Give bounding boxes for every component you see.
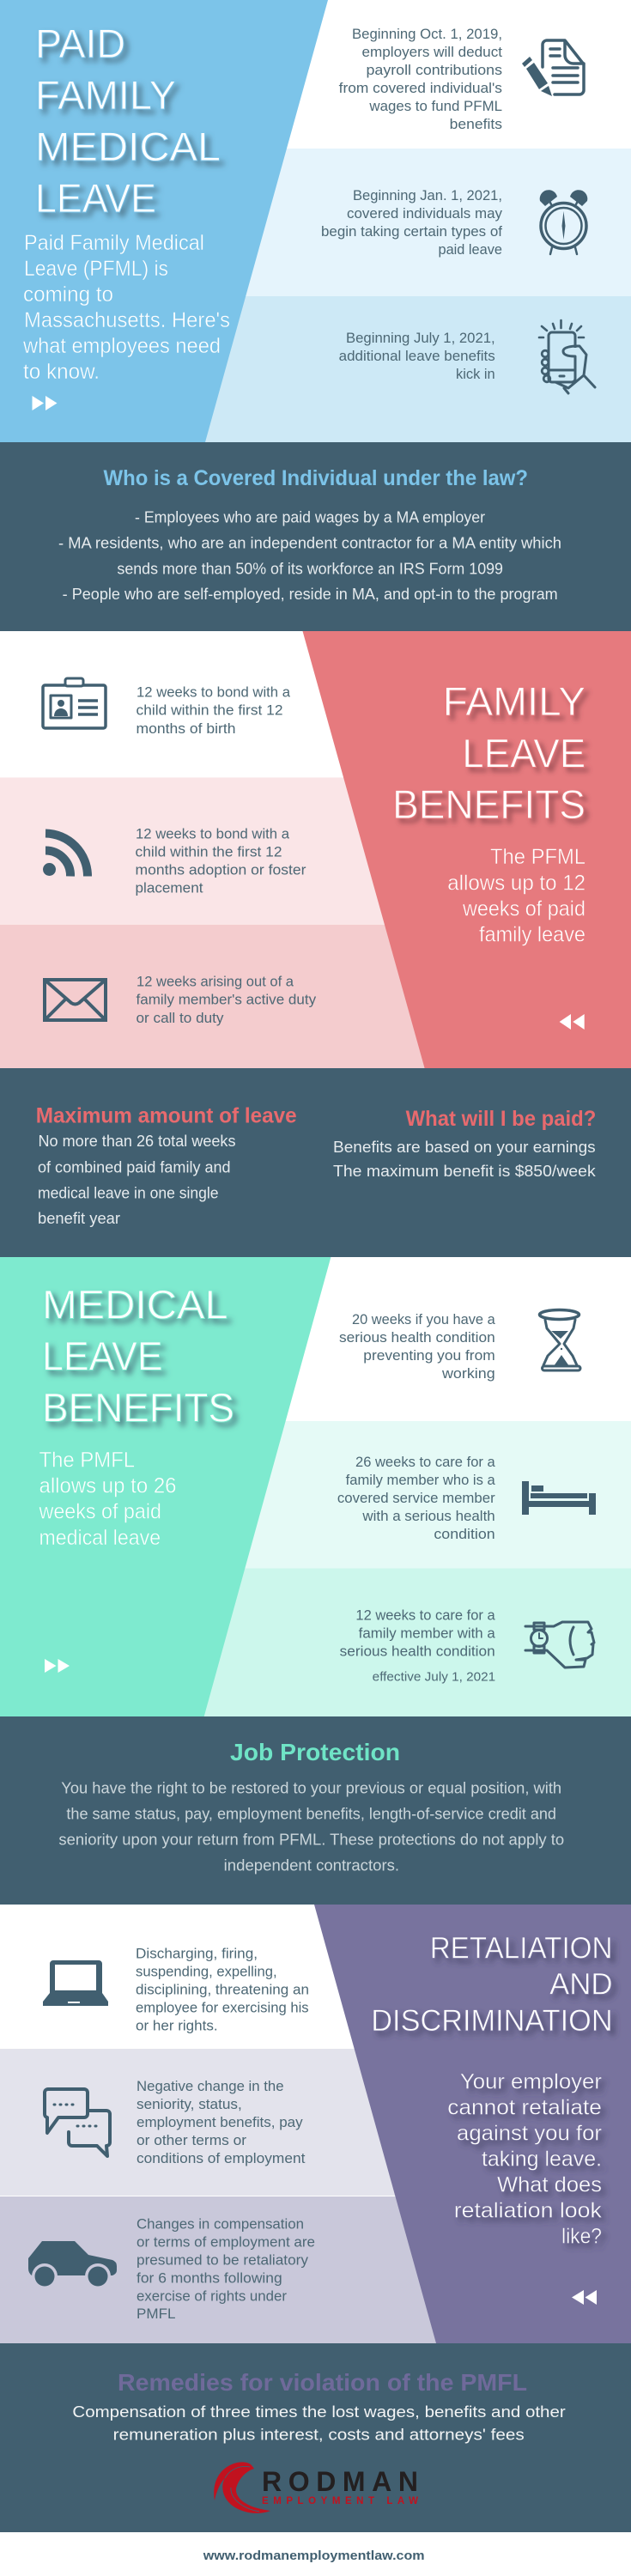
remedies text: Compensation of three times the lost wages, benefits and other: [72, 2403, 566, 2421]
text: maximum leave: medical leave in one single: [38, 1185, 218, 1202]
arrow: forward: [33, 396, 57, 410]
purple slanted panel: [314, 1905, 631, 2343]
summary text: [447, 845, 585, 946]
text: leave begins: begin taking certain types of: [321, 224, 502, 240]
text: bond adoption: [136, 827, 306, 896]
text: compensation changes: exercise of rights under: [137, 2288, 288, 2304]
row: serious health condition background: [0, 1257, 631, 1421]
footer website: www.rodmanemploymentlaw.com: [203, 2549, 425, 2563]
heading: Who is a Covered Individual under the law?: [103, 466, 528, 490]
text: negative change: conditions of employment: [137, 2151, 306, 2166]
text: leave begins: paid leave: [438, 242, 502, 258]
icon: id badge: [43, 678, 106, 728]
text: negative change: or other terms or: [137, 2133, 247, 2148]
icon: bed: [522, 1481, 596, 1515]
job protection text: independent contractors.: [224, 1856, 399, 1874]
teal slanted panel: [0, 1257, 331, 1716]
text: pay: Benefits are based on your earnings: [333, 1139, 596, 1156]
icon: hourglass: [539, 1310, 580, 1370]
summary text: medical leave: [39, 1526, 161, 1550]
text: leave begins: covered individuals may: [347, 206, 503, 222]
text: pay: [333, 1139, 597, 1180]
text: twenty six weeks: [337, 1455, 496, 1542]
panel: remedies: [0, 2343, 631, 2532]
text: bond adoption: child within the first 12: [136, 845, 282, 860]
text: twelve weeks: [340, 1607, 496, 1685]
icon: envelope: [45, 980, 106, 1020]
logo: rodman employment law: [214, 2462, 418, 2513]
text: bond adoption: months adoption or foster: [136, 863, 306, 878]
text: twelve weeks: family member with a: [359, 1625, 496, 1641]
blue slanted panel: [0, 0, 328, 442]
text: twelve weeks: 12 weeks to care for a: [355, 1607, 496, 1623]
summary text: The PFML: [490, 845, 585, 869]
heading: Remedies for violation of the PMFL: [118, 2369, 527, 2396]
intro text: to know.: [23, 360, 100, 384]
summary text: allows up to 12: [447, 871, 585, 895]
row: active duty background: [0, 924, 631, 1068]
covered individual list: - People who are self-employed, reside in MA, and opt-in to the program: [63, 586, 558, 603]
text: twenty weeks: preventing you from: [363, 1348, 495, 1364]
heading: maximum amount of leave: Maximum amount of leave: [36, 1103, 297, 1127]
title: BENEFITS: [392, 781, 585, 827]
logo: rodman employment law: RODMAN: [262, 2466, 418, 2497]
summary text: taking leave.: [482, 2148, 602, 2172]
intro text: coming to: [23, 283, 113, 307]
panel: paid family medical leave intro: [0, 0, 631, 442]
title: [392, 678, 585, 827]
summary text: [39, 1448, 176, 1550]
text: twenty weeks: working: [441, 1366, 495, 1382]
summary text: What does: [497, 2173, 602, 2197]
title: BENEFITS: [42, 1385, 234, 1431]
panel background: [0, 1716, 631, 1905]
heading: what will i be paid: What will I be paid?: [406, 1107, 596, 1131]
text: payroll contributions: from covered individual's: [339, 81, 502, 96]
summary text: family leave: [479, 922, 585, 946]
summary text: against you for: [457, 2122, 602, 2146]
text: twelve weeks: serious health condition: [340, 1643, 495, 1659]
summary text: Your employer: [460, 2070, 602, 2094]
text: payroll contributions: Beginning Oct. 1, 2019,: [352, 27, 502, 42]
title: LEAVE: [462, 730, 585, 775]
logo: rodman employment law: EMPLOYMENT LAW: [262, 2496, 418, 2506]
text: payroll contributions: payroll contributions: [366, 63, 502, 78]
text: additional benefits: [339, 331, 495, 382]
title: [371, 1932, 613, 2038]
text: additional benefits: kick in: [456, 367, 495, 382]
job protection text: [58, 1779, 564, 1874]
intro text: Leave (PFML) is: [24, 257, 168, 281]
text: maximum leave: of combined paid family and: [38, 1158, 231, 1176]
text: compensation changes: or terms of employment are: [137, 2234, 315, 2250]
covered individual list: - MA residents, who are an independent contractor for a MA entity which: [58, 534, 561, 551]
text: twenty six weeks: covered service member: [337, 1491, 495, 1506]
summary text: allows up to 26: [39, 1473, 177, 1498]
icon: hand holding phone: [539, 320, 595, 393]
row: bond within 12 months of birth background: [0, 631, 631, 778]
text: bond birth: months of birth: [136, 721, 235, 737]
title: AND: [549, 1968, 613, 2002]
row: covered individuals background: [0, 149, 631, 296]
text: bond adoption: 12 weeks to bond with a: [136, 827, 290, 842]
panel: retaliation and discrimination: [0, 1905, 631, 2343]
text: payroll contributions: benefits: [450, 117, 502, 132]
title: MEDICAL: [35, 124, 221, 169]
text: payroll contributions: wages to fund PFML: [368, 99, 502, 114]
icon: car: [28, 2241, 117, 2289]
title: PAID: [35, 21, 125, 66]
arrow: back: [572, 2290, 597, 2305]
icon: speech bubbles: [45, 2089, 110, 2156]
intro text: Paid Family Medical: [24, 231, 204, 255]
red slanted panel: [302, 631, 631, 1068]
text: bond adoption: placement: [136, 881, 203, 896]
text: discharging: [136, 1947, 309, 2034]
icon: rss signal: [43, 833, 88, 876]
summary text: like?: [561, 2225, 602, 2249]
text: negative change: Negative change in the: [137, 2079, 284, 2094]
text: discharging: Discharging, firing,: [136, 1947, 258, 1962]
job protection text: seniority upon your return from PFML. These protections do not apply to: [58, 1831, 564, 1848]
row: employer deductions background: [0, 0, 631, 149]
text: active duty: or call to duty: [136, 1011, 224, 1026]
text: maximum leave: [38, 1133, 235, 1227]
text: bond birth: [136, 684, 291, 737]
row: additional benefits background: [0, 296, 631, 442]
text: bond birth: 12 weeks to bond with a: [137, 684, 291, 700]
heading: Job Protection: [230, 1739, 400, 1765]
covered individual list: [58, 508, 561, 603]
panel background: [0, 442, 631, 631]
title: LEAVE: [35, 175, 156, 221]
remedies text: remuneration plus interest, costs and attorneys' fees: [113, 2426, 525, 2444]
job protection text: You have the right to be restored to your previous or equal position, with: [61, 1779, 561, 1796]
text: additional benefits: additional leave benefits: [339, 349, 495, 364]
intro text: what employees need: [22, 334, 221, 358]
text: leave begins: [321, 188, 503, 258]
text: negative change: [137, 2079, 306, 2166]
title: LEAVE: [42, 1333, 163, 1379]
title: FAMILY: [35, 72, 176, 118]
text: payroll contributions: [339, 27, 502, 132]
remedies text: [72, 2403, 566, 2444]
arrow: back: [560, 1014, 585, 1030]
row: discharging background: [0, 1905, 631, 2049]
text: compensation changes: presumed to be retaliatory: [137, 2252, 309, 2268]
text: compensation changes: [137, 2216, 315, 2322]
title: RETALIATION: [430, 1932, 613, 1965]
text: twenty six weeks: 26 weeks to care for a: [355, 1455, 496, 1470]
text: leave begins: Beginning Jan. 1, 2021,: [353, 188, 502, 204]
text: compensation changes: PMFL: [137, 2306, 175, 2322]
icon: laptop: [43, 1960, 108, 2006]
text: twenty six weeks: condition: [434, 1527, 495, 1542]
text: compensation changes: for 6 months following: [137, 2270, 282, 2286]
text: negative change: seniority, status,: [137, 2097, 242, 2112]
panel background: [0, 1068, 631, 1257]
summary text: weeks of paid: [462, 896, 585, 920]
panel: maximum leave and pay: [0, 1068, 631, 1257]
text: twenty weeks: 20 weeks if you have a: [352, 1312, 496, 1327]
summary text: weeks of paid: [39, 1500, 161, 1524]
text: twelve weeks: effective July 1, 2021: [373, 1670, 495, 1685]
row: changes in compensation background: [0, 2196, 631, 2343]
footer website: [0, 2532, 631, 2576]
text: pay: The maximum benefit is $850/week: [333, 1163, 597, 1180]
panel: job protection: [0, 1716, 631, 1905]
panel background: [0, 2343, 631, 2532]
panel: family leave benefits: [0, 631, 631, 1068]
title: [35, 21, 221, 221]
covered individual list: - Employees who are paid wages by a MA employer: [135, 508, 485, 526]
title: [42, 1282, 234, 1431]
summary text: The PMFL: [39, 1448, 135, 1472]
text: twenty weeks: [339, 1312, 496, 1382]
text: twenty six weeks: family member who is a: [346, 1473, 496, 1488]
row: adoption or foster background: [0, 778, 631, 924]
title: FAMILY: [443, 678, 585, 724]
row: negative change background: [0, 2049, 631, 2196]
row: family member background: [0, 1568, 631, 1716]
panel: medical leave benefits: [0, 1257, 631, 1716]
title: MEDICAL: [42, 1282, 228, 1327]
intro text: Massachusetts. Here's: [24, 308, 230, 332]
text: additional benefits: Beginning July 1, 2021,: [346, 331, 495, 346]
icon: alarm clock: [540, 190, 587, 254]
text: bond birth: child within the first 12: [136, 702, 283, 718]
job protection text: the same status, pay, employment benefits, length-of-service credit and: [66, 1805, 556, 1822]
arrow: forward: [45, 1659, 70, 1673]
intro text: [22, 231, 230, 384]
summary text: retaliation look: [454, 2199, 602, 2223]
text: maximum leave: No more than 26 total weeks: [38, 1133, 235, 1150]
panel: who is a covered individual: [0, 442, 631, 631]
title: DISCRIMINATION: [371, 2004, 613, 2038]
text: compensation changes: Changes in compensation: [137, 2216, 304, 2232]
text: payroll contributions: employers will deduct: [362, 45, 502, 60]
covered individual list: sends more than 50% of its workforce an IRS Form 1099: [117, 560, 503, 577]
text: maximum leave: benefit year: [38, 1210, 120, 1227]
text: active duty: 12 weeks arising out of a: [137, 974, 294, 989]
text: active duty: [136, 974, 317, 1026]
icon: document and pencil: [522, 40, 584, 96]
icon: wrist watch: [525, 1622, 594, 1668]
text: twenty six weeks: with a serious health: [361, 1509, 495, 1524]
row: covered service member background: [0, 1421, 631, 1568]
text: discharging: disciplining, threatening an: [136, 1983, 309, 1998]
text: active duty: family member's active duty: [136, 992, 317, 1007]
summary text: cannot retaliate: [447, 2096, 602, 2120]
text: twenty weeks: serious health condition: [339, 1330, 495, 1346]
text: discharging: employee for exercising his: [136, 2001, 309, 2016]
text: negative change: employment benefits, pay: [137, 2115, 303, 2130]
text: discharging: suspending, expelling,: [136, 1965, 277, 1980]
summary text: [447, 2070, 602, 2249]
text: discharging: or her rights.: [136, 2019, 218, 2034]
